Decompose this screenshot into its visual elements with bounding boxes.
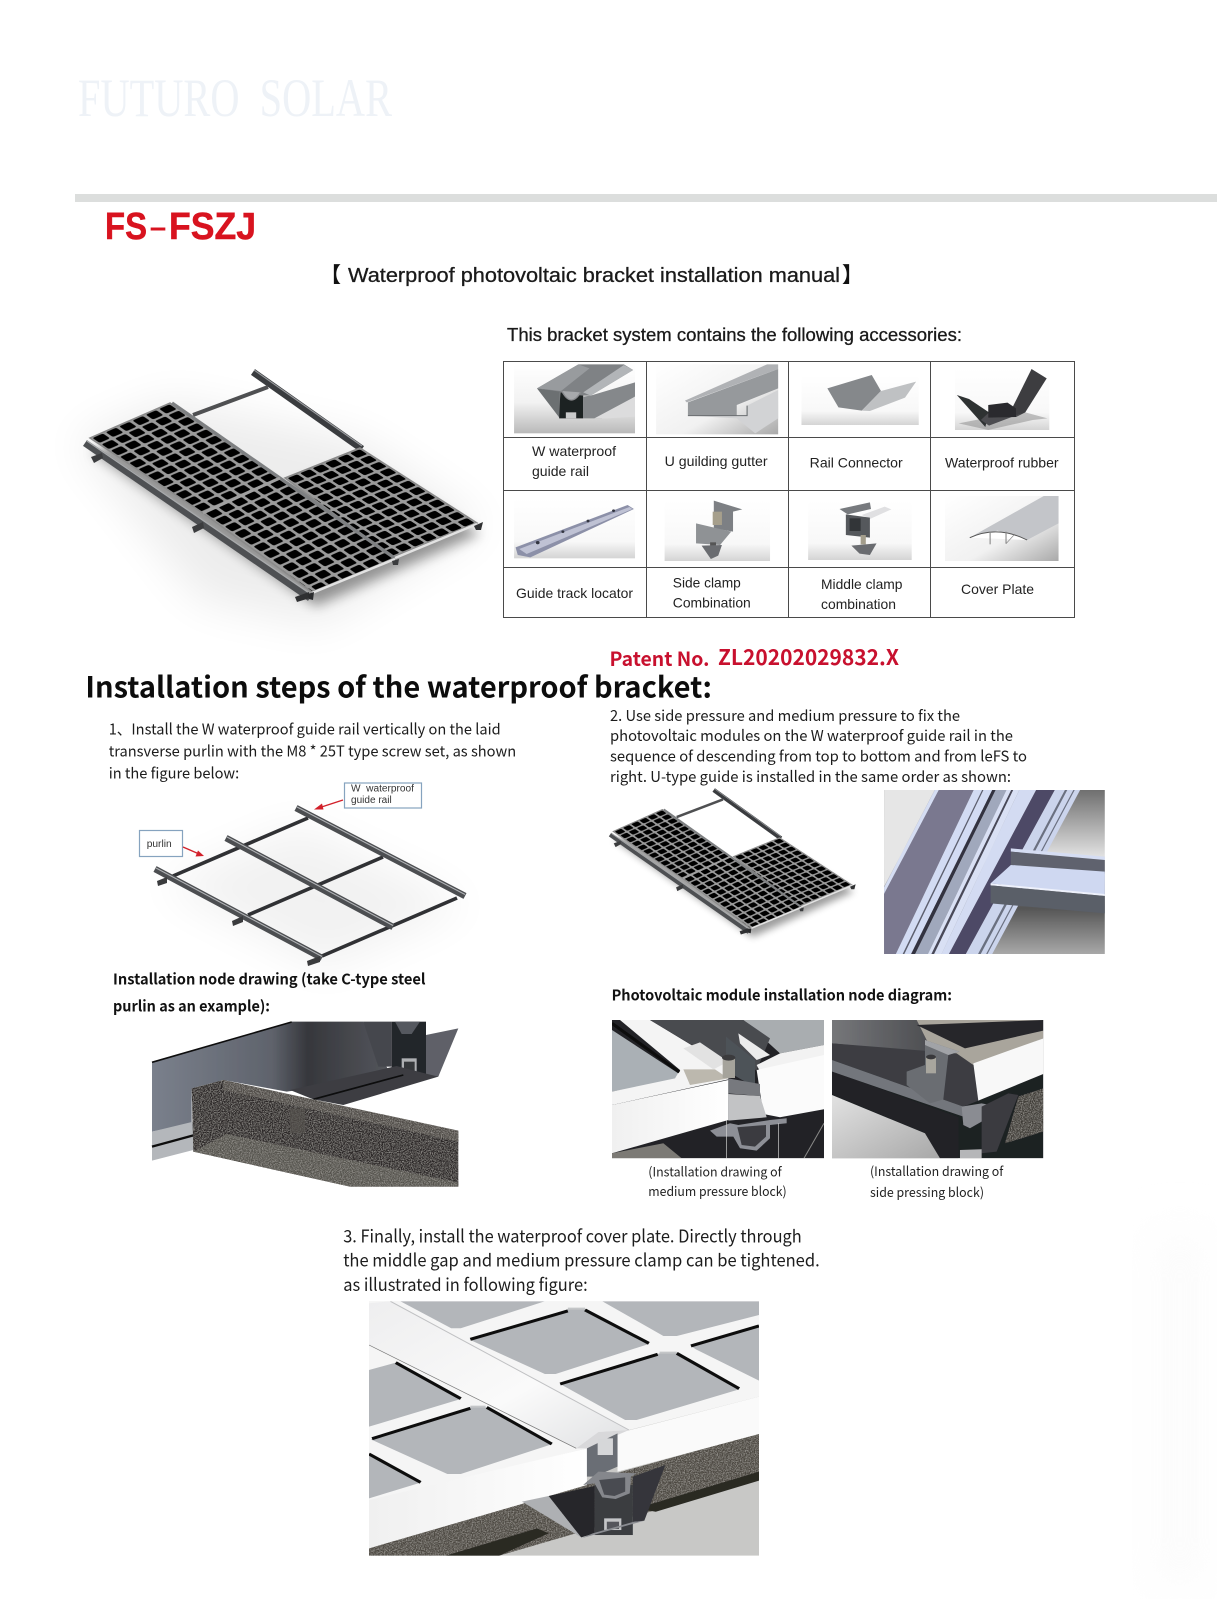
step 1 text: 1、Install the W waterproof guide rail vertically on the laid bbox=[109, 718, 501, 740]
caption: side pressing block: side pressing block) bbox=[870, 1182, 984, 1201]
node drawing heading: Installation node drawing (take C-type steel bbox=[113, 969, 426, 990]
label: Side clamp Combination: Side clamp bbox=[673, 575, 741, 591]
cell shadow edges bbox=[369, 1310, 759, 1482]
manual title: 】 bbox=[842, 259, 863, 289]
step 3 text bbox=[343, 1224, 820, 1297]
label: Middle clamp combination: Middle clamp bbox=[821, 576, 903, 592]
step 2 text: 2. Use side pressure and medium pressure to fix the bbox=[610, 705, 960, 726]
label: Guide track locator: Guide track locator bbox=[516, 585, 633, 601]
step 1 text: in the figure below: bbox=[109, 762, 239, 784]
icon: rail connector bbox=[801, 375, 919, 425]
manual title: Waterproof photovoltaic bracket installation manual bbox=[348, 265, 840, 287]
step 3 text: 3. Finally, install the waterproof cover plate. Directly through bbox=[343, 1224, 802, 1249]
label: W waterproof guide rail: guide rail bbox=[532, 463, 589, 479]
guide rails bbox=[155, 808, 465, 958]
step 1 figure: rails and purlins bbox=[140, 783, 470, 970]
step 1 text: transverse purlin with the M8 * 25T type screw set, as shown bbox=[109, 740, 516, 762]
label: U guilding gutter: U guilding gutter bbox=[665, 453, 768, 469]
patent number: ZL20202029832.X bbox=[718, 641, 899, 672]
purlin beam bbox=[369, 1433, 759, 1556]
step 2 text: sequence of descending from top to bottom and from leFS to bbox=[610, 746, 1027, 766]
arrow to rail bbox=[314, 800, 343, 810]
rail cross-section bbox=[576, 1430, 629, 1448]
figure: C-type steel purlin node bbox=[152, 1021, 458, 1187]
label: Cover Plate: Cover Plate bbox=[961, 581, 1034, 597]
header divider bar bbox=[75, 194, 1217, 202]
figure: side pressing block node bbox=[832, 1020, 1044, 1158]
icon: guide track locator bbox=[514, 498, 635, 558]
step 2 text: right. U-type guide is installed in the same order as shown: bbox=[610, 766, 1011, 787]
cover plate bbox=[369, 1301, 629, 1448]
manual title bbox=[320, 259, 863, 289]
glass cells bbox=[369, 1301, 759, 1498]
module 1 bbox=[90, 403, 280, 513]
label: W waterproof guide rail: W waterproof bbox=[532, 443, 616, 459]
manual title: 【 bbox=[320, 259, 341, 289]
model code FS-FSZJ bbox=[105, 206, 256, 248]
feet bbox=[157, 877, 320, 966]
label: Side clamp Combination: Combination bbox=[673, 595, 751, 611]
icon: waterproof rubber bbox=[955, 368, 1049, 430]
caption: medium pressure block bbox=[648, 1162, 787, 1200]
step 1 text bbox=[109, 718, 516, 784]
icon: W waterproof guide rail bbox=[514, 364, 635, 433]
icon: side clamp bbox=[665, 500, 770, 561]
model code FS-FSZJ: FS bbox=[105, 206, 147, 248]
accessories table bbox=[503, 361, 1074, 618]
node drawing heading bbox=[113, 969, 426, 1016]
icon: cover plate bbox=[945, 496, 1059, 561]
step 2 text bbox=[610, 705, 1027, 787]
accessories heading: This bracket system contains the following accessories: bbox=[507, 325, 962, 345]
caption: medium pressure block: (Installation drawing of bbox=[648, 1162, 782, 1181]
purlin bbox=[193, 387, 268, 415]
cell bevels bbox=[470, 1309, 677, 1407]
model code FS-FSZJ: FSZJ bbox=[169, 206, 256, 248]
hero image: solar array on rails bbox=[75, 370, 485, 625]
module 2 bbox=[203, 478, 395, 592]
patent number bbox=[610, 641, 899, 672]
module node diagram heading: Photovoltaic module installation node diagram: bbox=[612, 985, 952, 1006]
caption: side pressing block bbox=[870, 1161, 1004, 1201]
callout: W waterproof guide rail bbox=[344, 783, 422, 808]
callout: purlin: purlin bbox=[147, 838, 172, 850]
label: Waterproof rubber: Waterproof rubber bbox=[945, 455, 1059, 471]
arrow to purlin bbox=[183, 847, 204, 856]
watermark: FUTURO SOLAR: FUTURO SOLAR bbox=[78, 68, 392, 128]
installation steps heading: Installation steps of the waterproof bracket: bbox=[85, 664, 712, 706]
caption: medium pressure block: medium pressure block) bbox=[648, 1181, 787, 1200]
centre rail bbox=[172, 403, 396, 559]
back rail bbox=[253, 372, 362, 449]
model code FS-FSZJ: - bbox=[148, 206, 168, 248]
table grid bbox=[503, 361, 1074, 618]
callout: W waterproof guide rail: guide rail bbox=[351, 795, 392, 806]
front rail bbox=[85, 443, 310, 598]
callout: purlin bbox=[140, 830, 182, 856]
label: Middle clamp combination: combination bbox=[821, 596, 896, 612]
purlins bbox=[173, 818, 457, 956]
label: Middle clamp combination bbox=[821, 576, 903, 612]
step 3 text: the middle gap and medium pressure clamp can be tightened. bbox=[343, 1248, 820, 1273]
step 2 figure: U-type guide close-up bbox=[884, 790, 1105, 954]
feet bbox=[91, 453, 103, 463]
step 2 text: photovoltaic modules on the W waterproof guide rail in the bbox=[610, 725, 1013, 746]
label: W waterproof guide rail bbox=[532, 443, 616, 479]
step 3 text: as illustrated in following figure: bbox=[343, 1272, 588, 1297]
patent number: Patent No. bbox=[610, 643, 710, 672]
white module surface bbox=[369, 1301, 759, 1502]
caption: side pressing block: (Installation drawing of bbox=[870, 1161, 1004, 1180]
step 2 figure: array assembly bbox=[610, 789, 856, 937]
icon: middle clamp bbox=[808, 500, 912, 560]
callout: W waterproof guide rail: W waterproof bbox=[351, 784, 414, 794]
node drawing heading: purlin as an example): bbox=[113, 996, 270, 1016]
icon: U guilding gutter bbox=[656, 364, 778, 434]
figure: medium pressure block node bbox=[612, 1020, 824, 1158]
label: Side clamp Combination bbox=[673, 575, 751, 611]
label: Rail Connector: Rail Connector bbox=[810, 455, 903, 471]
figure: waterproof cover plate installed bbox=[369, 1301, 759, 1556]
module 3 bbox=[285, 448, 477, 557]
module shadow bbox=[92, 418, 480, 606]
